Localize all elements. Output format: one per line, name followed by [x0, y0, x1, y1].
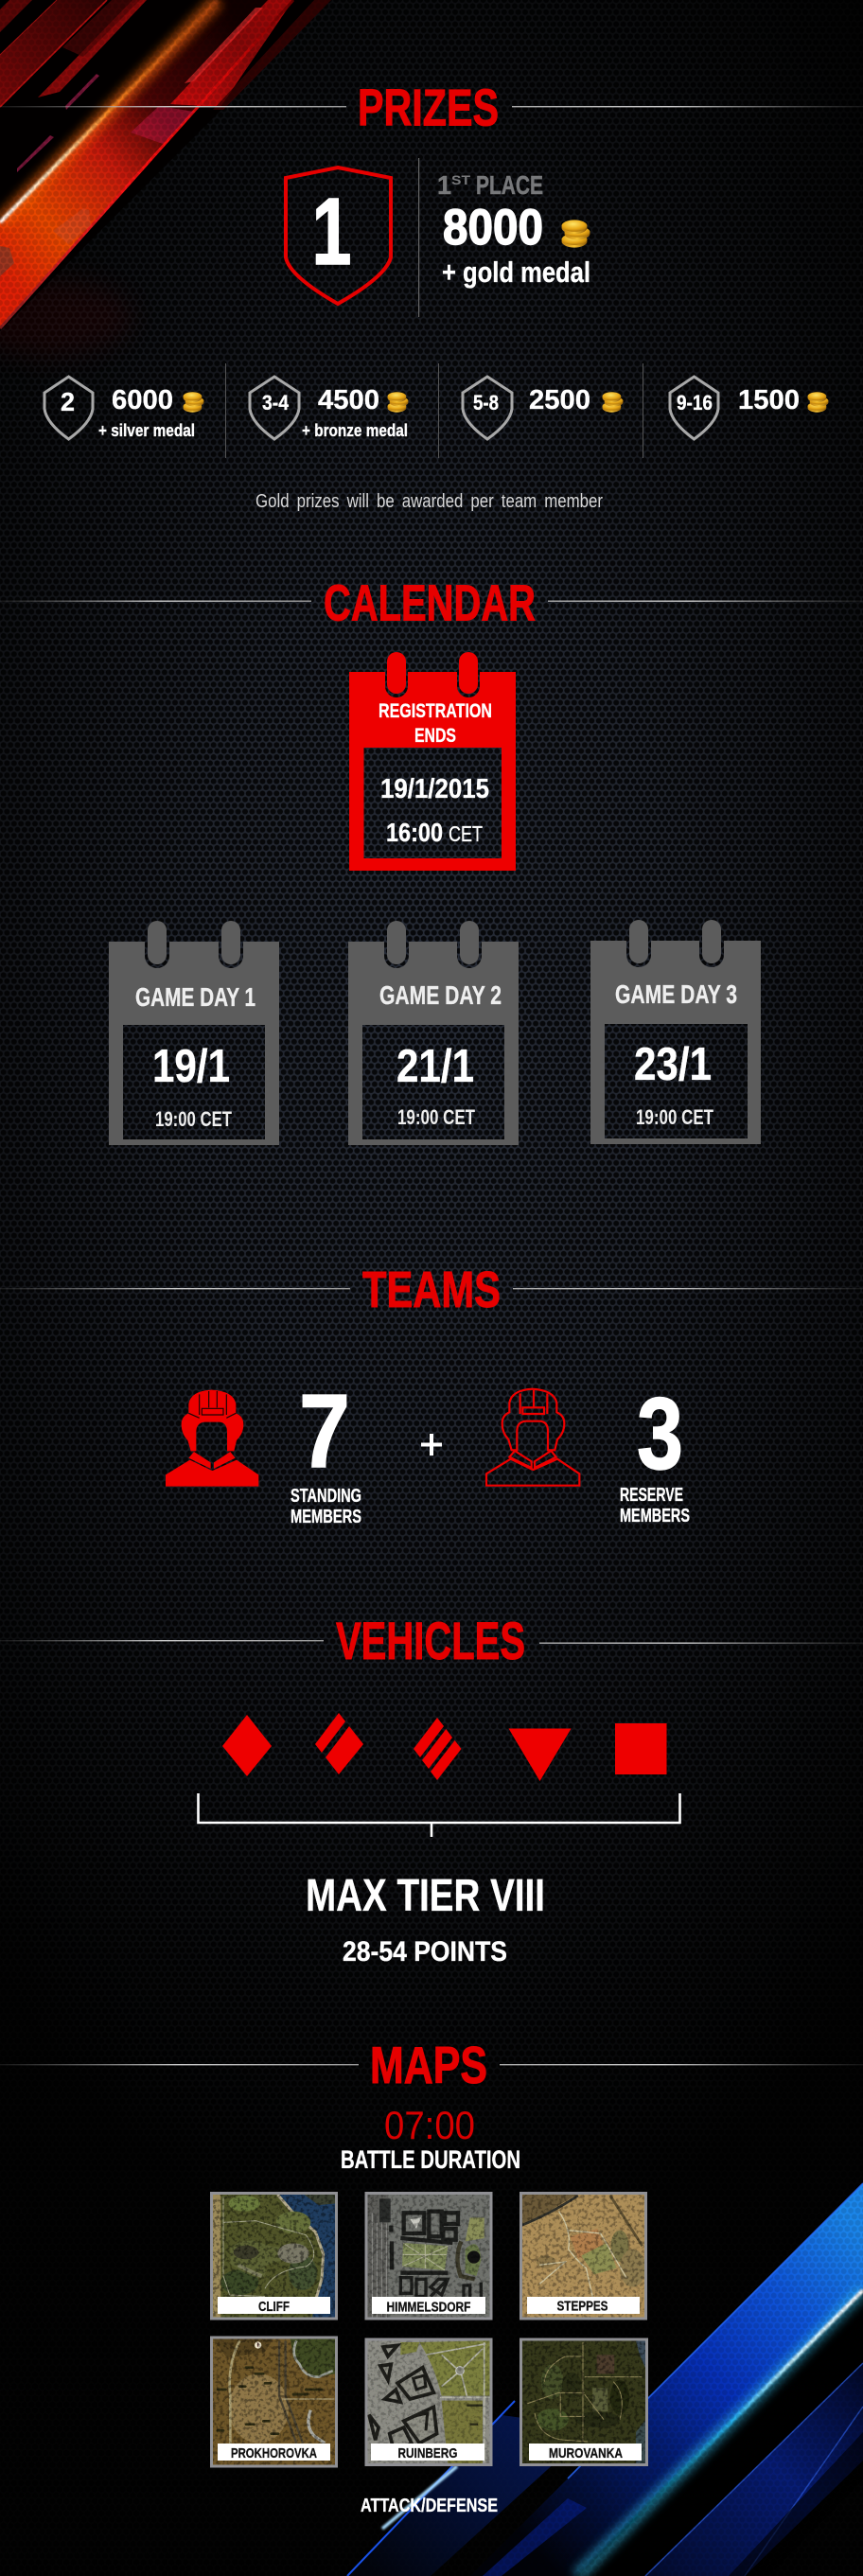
- section heading: maps: MAPS: [370, 2036, 487, 2094]
- points text: 28-54 POINTS: [343, 1936, 507, 1967]
- icon: first place shield: [286, 168, 391, 304]
- blue diagonal streaks: [347, 2183, 863, 2576]
- tier: second place: 2: [61, 387, 75, 416]
- section heading: prizes: PRIZES: [358, 78, 499, 136]
- map: cliff: [212, 2194, 337, 2319]
- divider: [438, 363, 439, 458]
- tier: second place: 6000: [112, 385, 173, 415]
- icon: artillery square: [615, 1723, 666, 1774]
- calendar: registration ends: 16:00: [386, 818, 443, 847]
- number seven: 7: [299, 1373, 350, 1490]
- map: himmelsdorf: HIMMELSDORF: [386, 2300, 471, 2315]
- first place label: PLACE: [476, 170, 543, 200]
- map: cliff: CLIFF: [258, 2299, 290, 2315]
- tier: ninth to sixteenth: [670, 377, 829, 439]
- tier: third and fourth: + bronze medal: [302, 421, 408, 440]
- calendar: registration ends: 19/1/2015: [380, 774, 489, 804]
- tier: ninth to sixteenth: 9-16: [677, 391, 713, 415]
- calendar: game day 3: [590, 920, 761, 1144]
- icon: first place shield: 1: [312, 179, 352, 285]
- icon: standing member helmet: [166, 1390, 258, 1487]
- section heading: teams: TEAMS: [362, 1262, 501, 1318]
- vehicle class icons: [222, 1713, 666, 1781]
- reserve members label: MEMBERS: [620, 1506, 690, 1526]
- calendar: game day 1: GAME DAY 1: [135, 982, 255, 1012]
- prize amount 8000: 8000: [443, 200, 543, 256]
- first place label: 1: [437, 170, 451, 200]
- plus sign: [421, 1434, 442, 1456]
- standing members label: MEMBERS: [291, 1507, 361, 1527]
- calendar: game day 2: [348, 921, 519, 1145]
- first place label: ST: [451, 172, 471, 187]
- map: murovanka: [520, 2339, 647, 2464]
- map: steppes: STEPPES: [556, 2298, 608, 2315]
- calendar: game day 3: 23/1: [634, 1039, 712, 1090]
- tier: second place: + silver medal: [98, 421, 195, 440]
- reserve members label: RESERVE: [620, 1485, 683, 1506]
- tier: third and fourth: 4500: [318, 385, 379, 415]
- first place label: [437, 170, 543, 200]
- calendar: game day 1: 19/1: [152, 1041, 230, 1092]
- divider: [418, 158, 419, 317]
- reserve members label: [620, 1485, 690, 1526]
- first place prize: [286, 158, 590, 317]
- map: ruinberg: [366, 2339, 491, 2464]
- tier: third and fourth: 3-4: [262, 391, 290, 415]
- section heading: vehicles: VEHICLES: [336, 1611, 525, 1670]
- calendar: registration ends: CET: [449, 821, 483, 846]
- tier: ninth to sixteenth: 1500: [738, 385, 800, 415]
- attack defense label: ATTACK/DEFENSE: [361, 2496, 498, 2516]
- map: prokhorovka: PROKHOROVKA: [231, 2445, 317, 2461]
- calendar: registration ends: ENDS: [414, 725, 456, 747]
- battle duration label: BATTLE DURATION: [341, 2145, 520, 2174]
- icon: tank destroyer triangle: [509, 1728, 572, 1781]
- map: murovanka: MUROVANKA: [549, 2445, 623, 2461]
- calendar: registration ends: [349, 652, 516, 871]
- icon: light tank diamond: [222, 1715, 272, 1776]
- tier: second place: [44, 377, 204, 440]
- note: gold prizes per team member: Gold prizes will be awarded per team member: [255, 491, 603, 512]
- map: steppes: [520, 2194, 645, 2319]
- battle time: 07:00: [384, 2103, 475, 2147]
- red diagonal streaks: [0, 0, 331, 355]
- calendar: game day 1: [109, 921, 279, 1145]
- map: ruinberg: RUINBERG: [397, 2445, 458, 2461]
- tier: fifth to eighth: 5-8: [473, 391, 499, 415]
- calendar: registration ends: REGISTRATION: [379, 700, 492, 722]
- divider: [225, 363, 226, 458]
- calendar: game day 2: 19:00 CET: [397, 1105, 475, 1129]
- calendar: game day 3: GAME DAY 3: [615, 979, 737, 1009]
- gold medal text: + gold medal: [442, 256, 590, 289]
- map: prokhorovka: [212, 2338, 337, 2466]
- calendar: game day 1: 19:00 CET: [155, 1107, 232, 1131]
- calendar: game day 3: 19:00 CET: [636, 1105, 713, 1129]
- max tier text: MAX TIER VIII: [306, 1871, 545, 1921]
- tier: third and fourth: [250, 377, 409, 440]
- standing members label: [291, 1486, 361, 1527]
- section heading: calendar: CALENDAR: [324, 575, 536, 632]
- icon: reserve member helmet: [486, 1389, 579, 1486]
- map: himmelsdorf: [366, 2194, 491, 2319]
- team composition: [166, 1373, 690, 1527]
- lower prize tiers: [44, 363, 829, 458]
- bracket: [199, 1793, 679, 1837]
- standing members label: STANDING: [291, 1486, 361, 1507]
- calendar: game day 2: GAME DAY 2: [379, 980, 502, 1010]
- icon: gold coins: [562, 220, 590, 248]
- calendar: game day 2: 21/1: [396, 1041, 474, 1092]
- tier: fifth to eighth: [463, 377, 623, 439]
- tier: fifth to eighth: 2500: [529, 385, 590, 415]
- icon: heavy tank diamond: [414, 1718, 462, 1780]
- icon: medium tank diamond: [315, 1713, 363, 1774]
- number three: 3: [637, 1376, 683, 1491]
